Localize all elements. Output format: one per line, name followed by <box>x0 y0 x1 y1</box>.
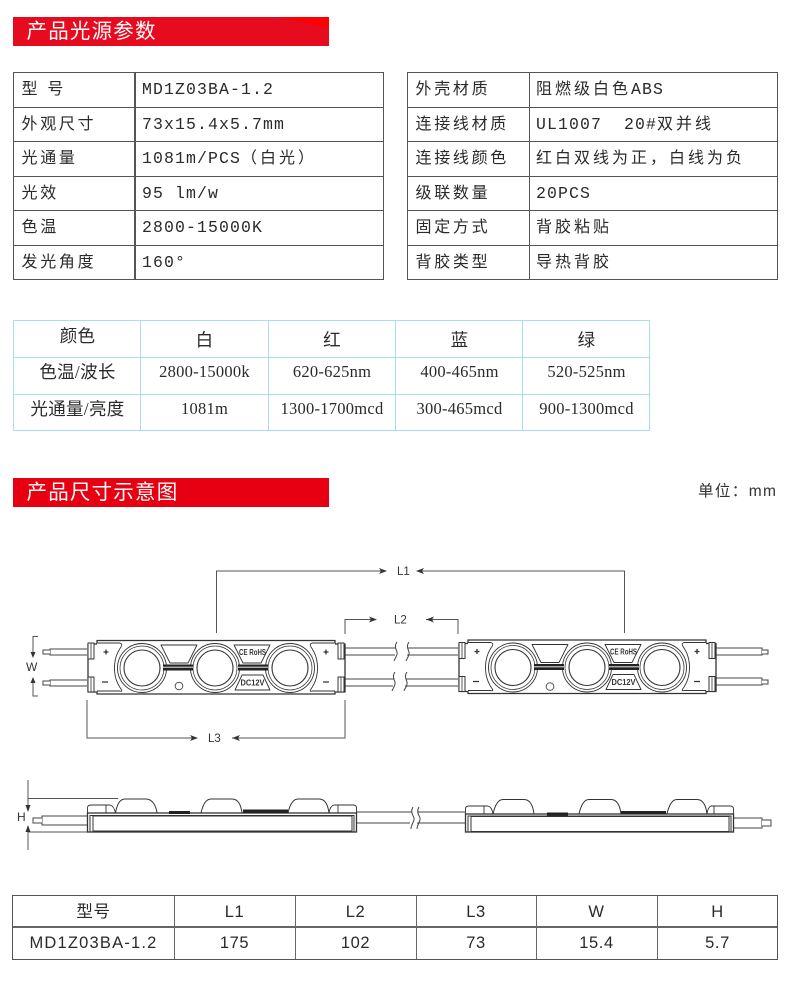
panel: specification table right: UL1007 20#双并线 <box>536 114 714 134</box>
heading: product light source parameters: 产品光源参数 <box>26 20 157 42</box>
unit note: 单位：mm <box>698 483 777 500</box>
module: top view right <box>459 640 716 694</box>
panel: specification table left: 95 lm/w <box>142 184 219 202</box>
dimension: L2: L2 <box>394 614 407 626</box>
panel: specification table right: 背胶类型 <box>416 254 490 270</box>
panel: dimension value table: 型号 <box>76 903 111 921</box>
panel: dimension value table: L2 <box>346 903 365 921</box>
dimension: W <box>26 636 38 696</box>
wires between the two modules <box>345 642 458 691</box>
panel: specification table right: 连接线材质 <box>416 116 509 132</box>
module: top view right: DC12V <box>612 678 636 687</box>
panel: colour comparison table: 蓝 <box>451 330 468 350</box>
side wires and break <box>33 807 771 829</box>
panel: dimension value table: 102 <box>341 934 370 952</box>
panel: colour comparison table: 颜色 <box>60 326 95 346</box>
panel: specification table left: 发光角度 <box>22 254 96 270</box>
panel: colour comparison table: 400-465nm <box>420 362 499 381</box>
panel: colour comparison table: 900-1300mcd <box>539 399 634 418</box>
panel: specification table right: 20PCS <box>536 184 591 202</box>
wires: right module output <box>716 648 768 685</box>
panel: dimension value table: 175 <box>220 934 249 952</box>
panel: colour comparison table: 绿 <box>578 330 595 350</box>
panel: specification table left <box>12 72 384 280</box>
panel: specification table right: 背胶粘贴 <box>536 219 612 236</box>
panel: colour comparison table: 红 <box>323 330 341 350</box>
panel: specification table left: 光效 <box>22 184 59 202</box>
module: top view left <box>88 640 345 694</box>
dimension: W: W <box>26 660 38 674</box>
panel: specification table right <box>406 72 778 280</box>
dimension: L3 <box>87 700 345 745</box>
panel: colour comparison table: 白 <box>196 330 213 350</box>
wires: left module input <box>43 649 87 686</box>
panel: dimension value table: 73 <box>466 934 486 952</box>
panel: dimension value table: L1 <box>225 903 244 921</box>
panel: dimension value table: 15.4 <box>579 934 614 952</box>
module: top view left: CE RoHS <box>239 648 267 657</box>
panel: colour comparison table: 300-465mcd <box>417 399 502 418</box>
panel: specification table right: 级联数量 <box>416 184 490 202</box>
panel: dimension value table: H <box>711 903 724 921</box>
panel: specification table right: 导热背胶 <box>536 254 612 270</box>
panel: specification table right: 阻燃级白色ABS <box>536 80 664 99</box>
panel: colour comparison table: 520-525nm <box>547 362 626 381</box>
heading: product light source parameters <box>12 16 329 46</box>
panel: specification table left: 型 号 <box>22 81 66 98</box>
panel: specification table left: 光通量 <box>22 150 78 167</box>
panel: specification table left: 73x15.4x5.7mm <box>142 114 285 134</box>
panel: specification table left: 色温 <box>22 219 59 236</box>
panel: colour comparison table: 1300-1700mcd <box>281 399 383 418</box>
panel: colour comparison table: 色温/波长 <box>39 362 116 382</box>
panel: colour comparison table: 2800-15000k <box>159 362 250 381</box>
panel: dimension value table: MD1Z03BA-1.2 <box>29 934 158 952</box>
heading: product dimension diagram: 产品尺寸示意图 <box>26 481 178 504</box>
module: top view right: CE RoHS <box>610 648 638 656</box>
panel: specification table left: 外观尺寸 <box>22 116 96 132</box>
panel: specification table left: MD1Z03BA-1.2 <box>142 80 274 99</box>
panel: specification table right: 外壳材质 <box>416 81 490 98</box>
module: side view left <box>88 799 356 832</box>
heading: product dimension diagram <box>12 478 329 507</box>
panel: dimension value table: 5.7 <box>705 934 730 952</box>
panel: specification table right: 连接线颜色 <box>416 150 509 167</box>
dimension: L1 <box>216 566 624 633</box>
panel: dimension value table: L3 <box>466 903 486 921</box>
panel: colour comparison table: 光通量/亮度 <box>30 399 125 419</box>
dimension: L2 <box>345 614 458 634</box>
module: top view left: DC12V <box>240 678 265 688</box>
panel: colour comparison table: 620-625nm <box>293 362 371 381</box>
panel: colour comparison table <box>13 320 650 431</box>
panel: specification table left: 1081m/PCS（白光） <box>142 149 317 168</box>
panel: specification table right: 固定方式 <box>416 219 490 236</box>
dimension: L1: L1 <box>397 566 410 578</box>
panel: specification table left: 2800-15000K <box>142 218 263 237</box>
panel: colour comparison table: 1081m <box>181 399 228 418</box>
panel: specification table right: 红白双线为正，白线为负 <box>536 150 745 167</box>
panel: dimension value table: W <box>588 903 605 921</box>
dimension: L3: L3 <box>208 733 221 745</box>
dimension: H: H <box>17 810 26 824</box>
module: side view right <box>466 800 734 832</box>
panel: dimension value table <box>12 895 778 960</box>
dimension: H <box>17 780 118 850</box>
panel: specification table left: 160° <box>142 252 186 272</box>
